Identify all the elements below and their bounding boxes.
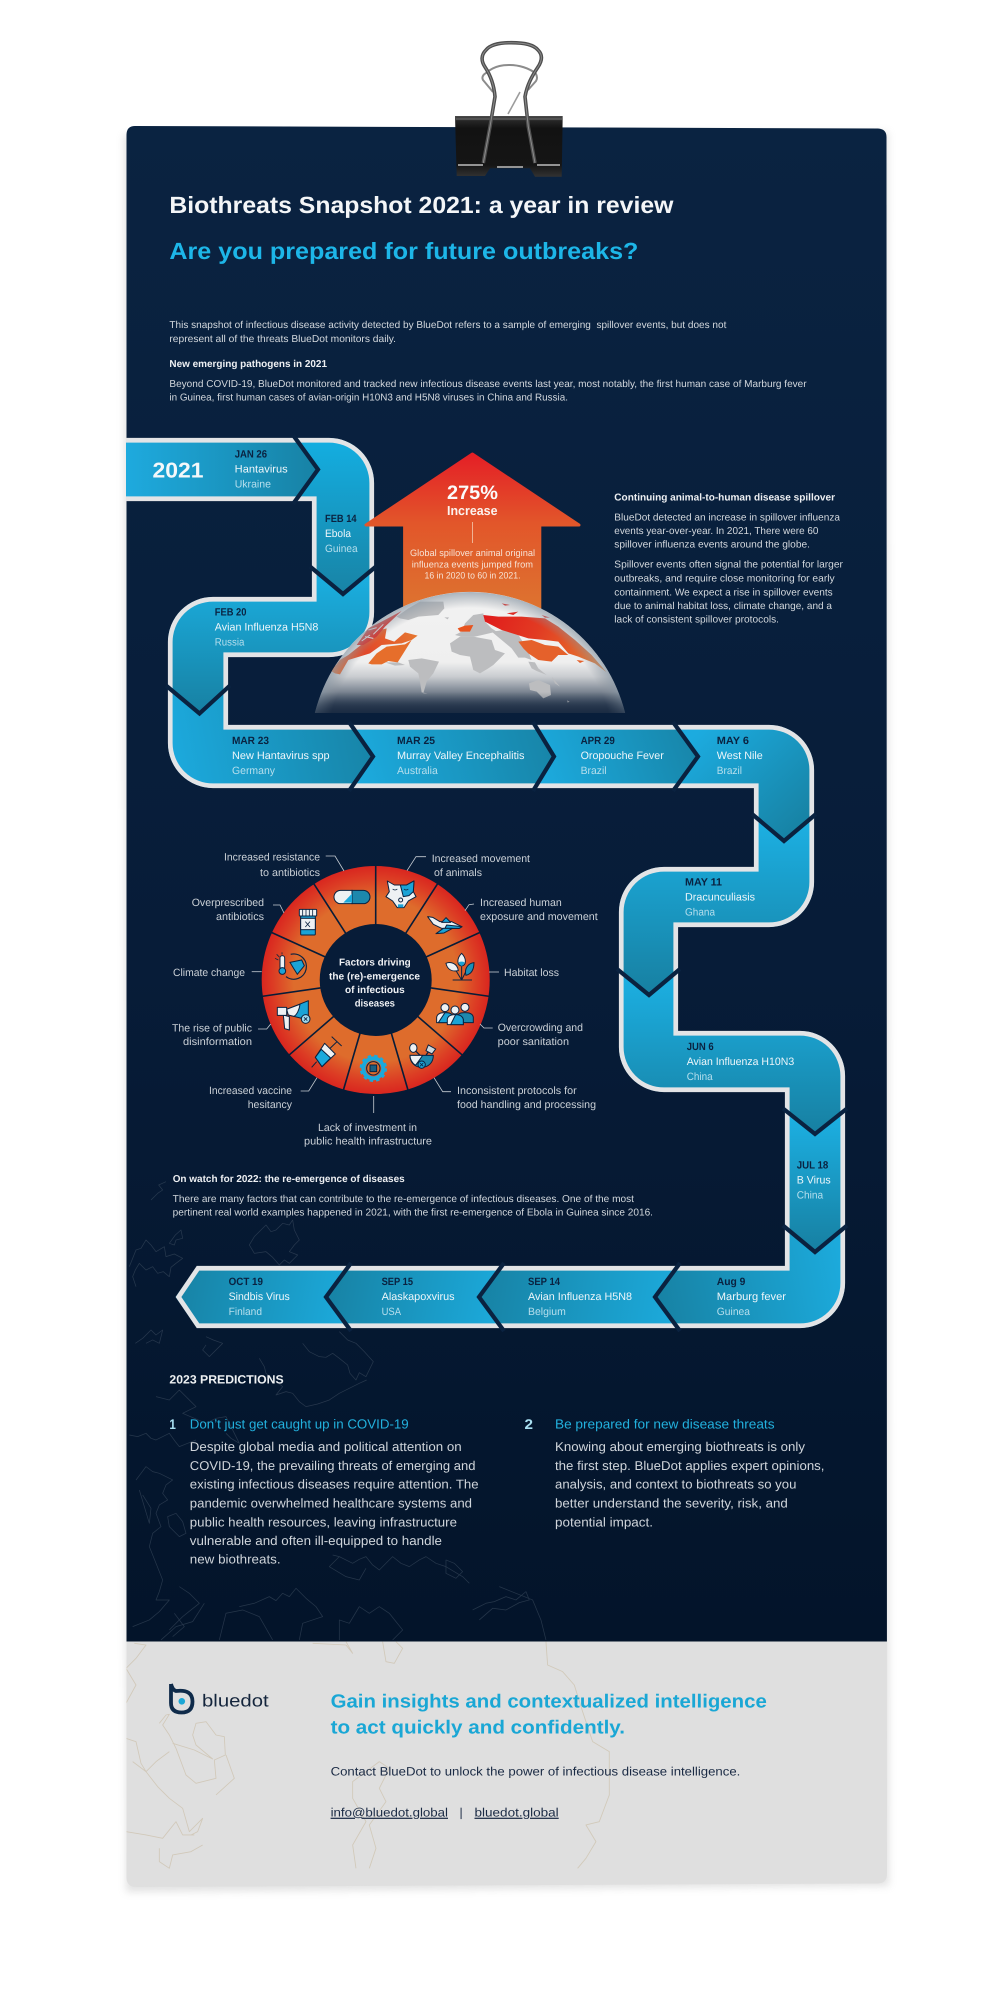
donut center text: of infectious bbox=[345, 985, 405, 996]
donut center text: Factors driving bbox=[339, 958, 411, 969]
globe fade bbox=[315, 694, 625, 713]
text: spillover detail bbox=[614, 512, 844, 626]
text: spillover detail: Spillover events often signal the potential for larger bbox=[614, 560, 844, 571]
donut center text: diseases bbox=[355, 999, 395, 1010]
donut separators bbox=[262, 865, 490, 1090]
icon: gear bbox=[361, 1056, 385, 1080]
continents: affected Europe bbox=[458, 625, 473, 632]
event: Jan 26: JAN 26 bbox=[235, 449, 267, 461]
event: Feb 20: FEB 20 bbox=[215, 607, 246, 619]
event: Feb 14: FEB 14 bbox=[325, 513, 357, 525]
text: spillover detail: events year-over-year. In 2021, There were 60 bbox=[614, 526, 819, 537]
text: on watch bbox=[173, 1194, 653, 1219]
logo wordmark: bluedot bbox=[202, 1691, 269, 1711]
contact links: bluedot.global bbox=[474, 1806, 559, 1820]
donut center text bbox=[329, 958, 420, 1010]
icon: fox bbox=[386, 881, 416, 908]
ribbon chevron dividers bbox=[166, 435, 847, 1331]
intro text: This snapshot of infectious disease activity detected by BlueDot refers to a sample of emerging spillover events, but does not bbox=[169, 320, 727, 331]
event: Sep 15: USA bbox=[382, 1306, 402, 1318]
stat description: 16 in 2020 to 60 in 2021. bbox=[424, 571, 520, 581]
label: food protocols: Inconsistent protocols for bbox=[457, 1085, 577, 1097]
prediction 1 body bbox=[190, 1439, 479, 1567]
icon: airplane bbox=[428, 917, 462, 934]
event: Sep 14: SEP 14 bbox=[528, 1276, 560, 1288]
continents bbox=[331, 602, 607, 703]
rear wire bbox=[482, 65, 537, 92]
event: Feb 20 bbox=[215, 607, 318, 649]
event: Jun 6: JUN 6 bbox=[687, 1041, 714, 1053]
call to action heading: Gain insights and contextualized intelligence bbox=[331, 1691, 767, 1712]
globe rim shading bbox=[315, 592, 625, 713]
label: overprescribed: Overprescribed bbox=[192, 897, 264, 909]
number 2: 2 bbox=[524, 1416, 533, 1432]
event: Jul 18 bbox=[797, 1160, 831, 1202]
continents: affected North America bbox=[331, 628, 418, 674]
call to action heading: to act quickly and confidently. bbox=[331, 1718, 625, 1739]
event: Jul 18: JUL 18 bbox=[797, 1160, 828, 1172]
stat: 275%: 275% bbox=[447, 482, 498, 504]
event: May 11: MAY 11 bbox=[685, 876, 722, 888]
event: Feb 14 bbox=[325, 513, 358, 555]
event: Feb 14: Ebola bbox=[325, 528, 351, 540]
contact links: info@bluedot.global bbox=[331, 1806, 448, 1820]
prediction 1 body: existing infectious diseases require attention. The bbox=[190, 1477, 479, 1492]
text: new emerging pathogens: Beyond COVID-19, BlueDot monitored and tracked new infectious disease events last year, most notably, the first human case of Marburg fever bbox=[169, 379, 807, 390]
event: Jun 6: China bbox=[687, 1071, 713, 1083]
prediction 2 body: Knowing about emerging biothreats is only bbox=[555, 1439, 806, 1454]
event: Apr 29 bbox=[581, 735, 664, 777]
event: Aug 9: Guinea bbox=[717, 1306, 750, 1318]
label: disinformation: disinformation bbox=[183, 1036, 252, 1048]
event: Oct 19: Sindbis Virus bbox=[229, 1291, 290, 1303]
event: Feb 14: Guinea bbox=[325, 543, 358, 555]
label: human exposure: Increased human bbox=[480, 897, 562, 909]
label: overprescribed: antibiotics bbox=[216, 911, 264, 923]
prediction 2 body: the first step. BlueDot applies expert opinions, bbox=[555, 1458, 824, 1473]
event: Oct 19: OCT 19 bbox=[229, 1276, 263, 1288]
prediction 2 heading: Be prepared for new disease threats bbox=[555, 1416, 775, 1431]
world map contour lines on navy bbox=[129, 1182, 546, 1640]
icon: food bowl bbox=[410, 1044, 436, 1068]
event: Mar 23: MAR 23 bbox=[232, 735, 269, 747]
event: Aug 9: Marburg fever bbox=[717, 1291, 786, 1303]
prediction 1 body: new biothreats. bbox=[190, 1552, 281, 1567]
globe bbox=[314, 592, 626, 713]
call to action heading bbox=[331, 1691, 767, 1739]
subtitle: Are you prepared for future outbreaks? bbox=[169, 238, 638, 264]
stat description bbox=[410, 548, 535, 581]
heading: predictions: 2023 PREDICTIONS bbox=[169, 1372, 284, 1386]
event: Mar 25: Australia bbox=[397, 765, 438, 777]
event: May 6: West Nile bbox=[717, 750, 763, 762]
text: spillover detail: lack of consistent spillover protocols. bbox=[614, 615, 779, 626]
donut chart: factors bbox=[172, 852, 598, 1148]
label: vaccine hesitancy: hesitancy bbox=[248, 1099, 293, 1111]
label: human exposure bbox=[480, 897, 598, 923]
event: Mar 23: Germany bbox=[232, 765, 276, 777]
intro text bbox=[169, 320, 727, 345]
prediction 1 heading: Don’t just get caught up in COVID-19 bbox=[190, 1416, 409, 1431]
contact links bbox=[331, 1806, 559, 1820]
label: resistance: to antibiotics bbox=[260, 867, 320, 879]
event: Mar 25 bbox=[397, 735, 525, 777]
event: May 11: Dracunculiasis bbox=[685, 891, 756, 903]
donut center text: the (re)-emergence bbox=[329, 972, 420, 982]
event: May 6: MAY 6 bbox=[717, 735, 749, 747]
label: climate change: Climate change bbox=[173, 967, 245, 979]
paper sheet bbox=[120, 120, 895, 1892]
event: Jul 18: B Virus bbox=[797, 1174, 831, 1186]
label: food protocols bbox=[457, 1085, 596, 1111]
prediction 2 body bbox=[555, 1439, 824, 1529]
continents: grey bbox=[385, 602, 570, 703]
prediction 2 bbox=[524, 1416, 824, 1529]
label: resistance: Increased resistance bbox=[224, 852, 320, 864]
continents: Canadian arctic bbox=[357, 611, 402, 645]
prediction 1 body: COVID-19, the prevailing threats of emerging and bbox=[190, 1458, 476, 1473]
heading: on watch: On watch for 2022: the re-emergence of diseases bbox=[173, 1174, 405, 1185]
paper shadow bbox=[124, 132, 889, 1892]
arrow: 275% increase bbox=[366, 454, 579, 612]
event: Feb 20: Avian Influenza H5N8 bbox=[215, 622, 318, 634]
label: overcrowding: Overcrowding and bbox=[498, 1022, 583, 1034]
prediction 1 body: vulnerable and often ill-equipped to handle bbox=[190, 1533, 442, 1548]
text: spillover detail: due to animal habitat loss, climate change, and a bbox=[614, 601, 832, 612]
icon: climate globe bbox=[275, 952, 306, 979]
year label: 2021 bbox=[152, 458, 204, 482]
label: movement of animals: of animals bbox=[434, 867, 482, 879]
world map contour lines on footer bbox=[126, 1642, 609, 1868]
clip body bbox=[455, 116, 563, 177]
event: Sep 14: Avian Influenza H5N8 bbox=[528, 1291, 632, 1303]
event: Jan 26: Hantavirus bbox=[235, 464, 288, 476]
text: spillover detail: containment. We expect a rise in spillover events bbox=[614, 587, 833, 598]
icon: megaphone bbox=[277, 1001, 310, 1030]
event: Jan 26 bbox=[235, 449, 288, 491]
event: Aug 9: Aug 9 bbox=[717, 1276, 745, 1288]
label: public health: Lack of investment in bbox=[318, 1122, 417, 1134]
stat description: Global spillover animal original bbox=[410, 548, 535, 558]
prediction 2 body: better understand the severity, risk, and bbox=[555, 1495, 788, 1510]
event: Apr 29: APR 29 bbox=[581, 735, 615, 747]
event: May 11: Ghana bbox=[685, 906, 715, 918]
heading: spillover: Continuing animal-to-human disease spillover bbox=[614, 492, 835, 503]
label: movement of animals bbox=[432, 853, 530, 879]
label: overcrowding: poor sanitation bbox=[498, 1036, 569, 1048]
label: habitat loss: Habitat loss bbox=[504, 967, 559, 979]
contact text: Contact BlueDot to unlock the power of infectious disease intelligence. bbox=[331, 1764, 740, 1778]
event: Mar 23: New Hantavirus spp bbox=[232, 750, 330, 762]
continents: affected Russia bbox=[483, 615, 607, 672]
logo: bluedot bbox=[171, 1684, 269, 1712]
text: spillover detail: spillover influenza events around the globe. bbox=[614, 540, 810, 551]
event: Mar 25: Murray Valley Encephalitis bbox=[397, 750, 525, 762]
label: human exposure: exposure and movement bbox=[480, 911, 598, 923]
footer panel bbox=[120, 1642, 895, 1892]
label: food protocols: food handling and processing bbox=[457, 1099, 596, 1111]
event: Jan 26: Ukraine bbox=[235, 479, 271, 491]
stat description: influenza events jumped from bbox=[412, 560, 533, 570]
label: vaccine hesitancy bbox=[209, 1085, 293, 1111]
event: Oct 19: Finland bbox=[229, 1306, 262, 1318]
icon: capsule bbox=[334, 890, 370, 904]
number 1: 1 bbox=[169, 1416, 176, 1432]
event: Sep 14 bbox=[528, 1276, 632, 1318]
event: Feb 20: Russia bbox=[215, 637, 244, 649]
event: Sep 15: Alaskapoxvirus bbox=[382, 1291, 455, 1303]
icon: people bbox=[437, 1003, 473, 1025]
event: May 6: Brazil bbox=[717, 765, 742, 777]
logo mark bbox=[171, 1684, 192, 1712]
text: spillover detail: outbreaks, and require close monitoring for early bbox=[614, 574, 835, 585]
text: new emerging pathogens: in Guinea, first human cases of avian-origin H10N3 and H5N8 viruses in China and Russia. bbox=[169, 392, 568, 404]
infographic page bbox=[122, 40, 891, 1894]
leader lines bbox=[252, 856, 499, 1113]
icon: plant bbox=[446, 953, 474, 980]
event: Mar 25: MAR 25 bbox=[397, 735, 435, 747]
event: Aug 9 bbox=[717, 1276, 786, 1318]
prediction 2 body: potential impact. bbox=[555, 1514, 653, 1529]
text: new emerging pathogens bbox=[169, 379, 807, 404]
label: disinformation: The rise of public bbox=[172, 1023, 253, 1035]
label: vaccine hesitancy: Increased vaccine bbox=[209, 1085, 292, 1097]
label: resistance bbox=[224, 852, 320, 879]
event: Jul 18: China bbox=[797, 1190, 823, 1202]
front wire bbox=[482, 43, 541, 163]
event: Jun 6 bbox=[687, 1041, 794, 1083]
heading: new emerging pathogens: New emerging pathogens in 2021 bbox=[169, 359, 327, 370]
event: Sep 15: SEP 15 bbox=[382, 1276, 413, 1288]
prediction 1 bbox=[169, 1416, 479, 1567]
prediction 1 body: pandemic overwhelmed healthcare systems and bbox=[190, 1495, 472, 1510]
navy panel bbox=[120, 120, 895, 1642]
text: spillover detail: BlueDot detected an increase in spillover influenza bbox=[614, 512, 840, 523]
event: Oct 19 bbox=[229, 1276, 290, 1318]
event: Jun 6: Avian Influenza H10N3 bbox=[687, 1056, 794, 1068]
label: overprescribed bbox=[192, 897, 264, 923]
label: overcrowding bbox=[498, 1022, 583, 1048]
label: movement of animals: Increased movement bbox=[432, 853, 530, 865]
label: disinformation bbox=[172, 1023, 253, 1048]
event: Apr 29: Brazil bbox=[581, 765, 607, 777]
icon: pill bottle bbox=[299, 909, 317, 935]
ribbon segments bbox=[126, 438, 845, 1328]
prediction 1 body: Despite global media and political attention on bbox=[190, 1439, 462, 1454]
intro text: represent all of the threats BlueDot monitors daily. bbox=[169, 334, 396, 345]
donut ring bbox=[262, 866, 490, 1094]
contact links: | bbox=[460, 1806, 463, 1820]
text: on watch: There are many factors that can contribute to the re-emergence of infectious diseases. One of the most bbox=[173, 1194, 634, 1205]
stat label: Increase bbox=[447, 503, 498, 518]
timeline ribbon bbox=[126, 435, 847, 1331]
continents: affected China bbox=[518, 640, 568, 662]
event: May 11 bbox=[685, 876, 756, 918]
event: Sep 15 bbox=[382, 1276, 455, 1318]
title: Biothreats Snapshot 2021: a year in review bbox=[169, 192, 674, 218]
ribbon white border bbox=[126, 440, 843, 1326]
event: Apr 29: Oropouche Fever bbox=[581, 750, 664, 762]
icon: syringe bbox=[312, 1037, 342, 1067]
label: public health bbox=[304, 1122, 432, 1148]
event: Mar 23 bbox=[232, 735, 330, 777]
text: on watch: pertinent real world examples happened in 2021, with the first re-emergence of Ebola in Guinea since 2016. bbox=[173, 1208, 653, 1219]
event: May 6 bbox=[717, 735, 763, 777]
icon: binder clip bbox=[455, 43, 563, 177]
prediction 2 body: analysis, and context to biothreats so you bbox=[555, 1477, 796, 1492]
prediction 1 body: public health resources, leaving infrastructure bbox=[190, 1514, 457, 1529]
label: public health: public health infrastructure bbox=[304, 1136, 432, 1148]
event: Sep 14: Belgium bbox=[528, 1306, 566, 1318]
